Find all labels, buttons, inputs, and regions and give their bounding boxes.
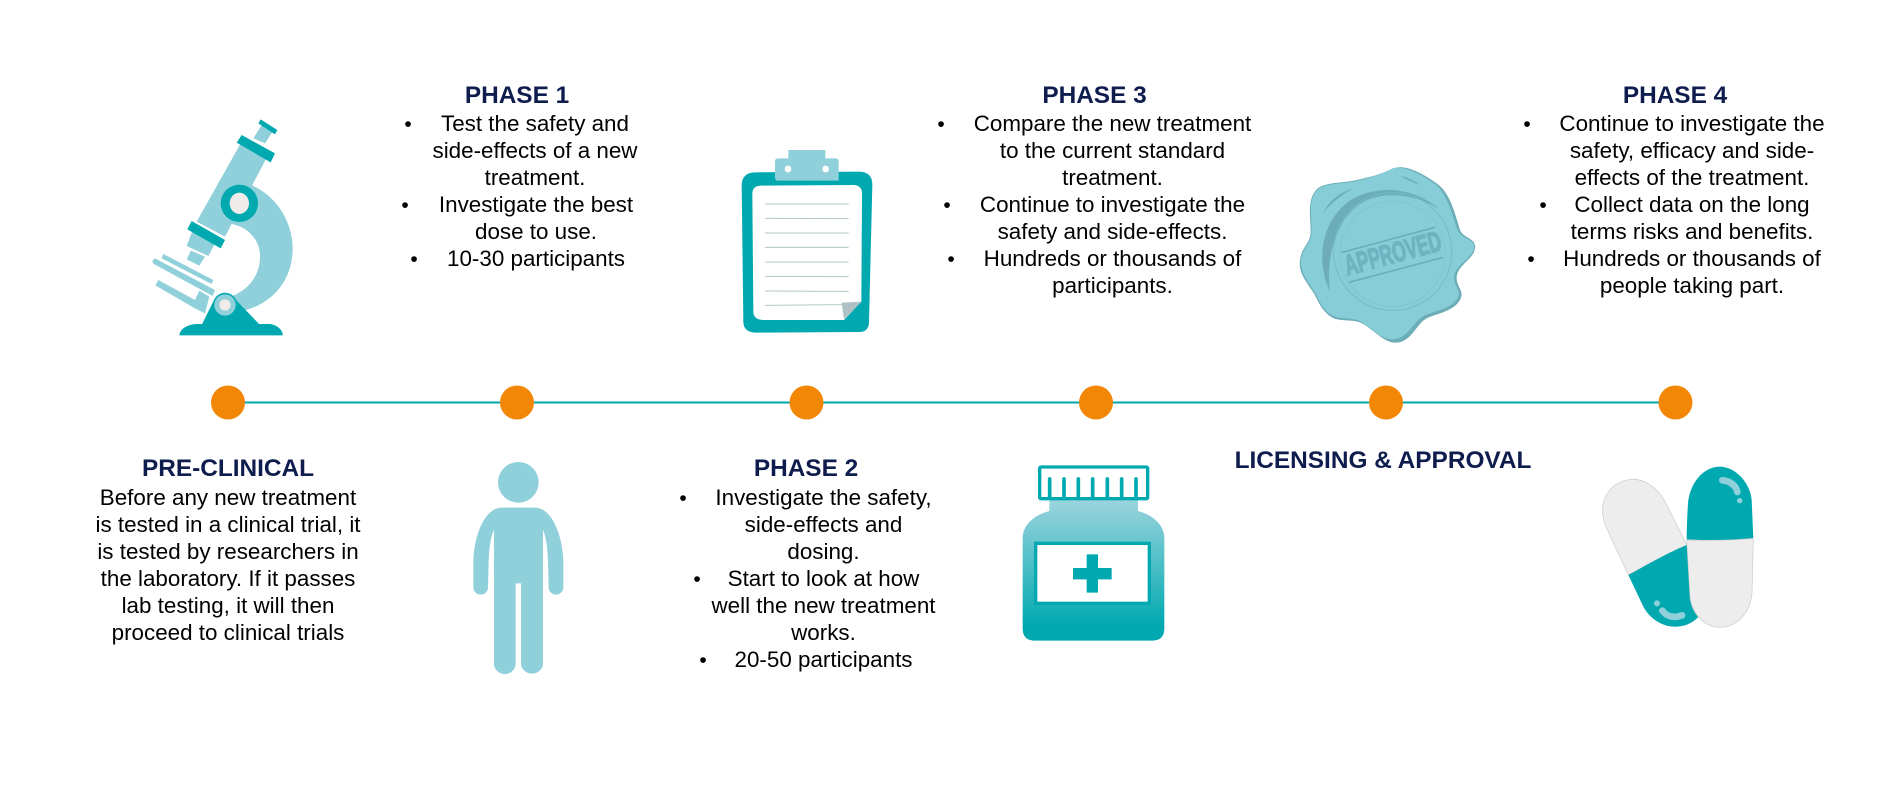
timeline	[211, 386, 1692, 420]
bullet list: phase 2: •	[693, 568, 701, 591]
bullet list: phase 1: •	[410, 248, 418, 271]
bullet list: phase 3: safety and side-effects.	[998, 219, 1227, 244]
icon: approved wax seal	[1300, 167, 1475, 343]
paragraph: pre-clinical: Before any new treatment	[100, 485, 357, 510]
text block: phase 3	[937, 82, 1252, 298]
paragraph: pre-clinical: the laboratory. If it passes	[101, 566, 355, 591]
bullet list: phase 3: treatment.	[1062, 165, 1163, 190]
bullet list: phase 4: people taking part.	[1600, 273, 1784, 298]
text block: phase 4	[1523, 82, 1825, 298]
text block: phase 1	[401, 82, 638, 271]
icon: approved wax seal: APPROVED	[1341, 226, 1445, 282]
icon: capsules	[1603, 467, 1753, 627]
bullet list: phase 3: to the current standard	[1000, 138, 1225, 163]
bullet list: phase 1: dose to use.	[475, 219, 597, 244]
bullet list: phase 1: •	[404, 113, 412, 136]
timeline dot: licensing	[1369, 386, 1403, 420]
icon: clipboard	[742, 150, 872, 333]
heading: licensing and approval: LICENSING & APPROVAL	[1235, 447, 1531, 474]
bullet list: phase 3: Compare the new treatment	[974, 111, 1252, 136]
bullet list: phase 2: well the new treatment	[710, 593, 936, 618]
bullet list: phase 2: Start to look at how	[728, 566, 920, 591]
timeline dot: phase 4	[1658, 386, 1692, 420]
bullet list: phase 2: dosing.	[787, 539, 860, 564]
bullet list: phase 3: Hundreds or thousands of	[984, 246, 1242, 271]
bullet list: phase 3: •	[943, 194, 951, 217]
bullet list: phase 3: •	[937, 113, 945, 136]
icon: medicine bottle	[1023, 467, 1164, 641]
paragraph: pre-clinical: proceed to clinical trials	[112, 620, 344, 645]
bullet list: phase 4: •	[1523, 113, 1531, 136]
bullet list: phase 2: 20-50 participants	[734, 647, 912, 672]
bullet list: phase 2: •	[699, 649, 707, 672]
bullet list: phase 2: Investigate the safety,	[715, 485, 932, 510]
bullet list: phase 4: Collect data on the long	[1574, 192, 1810, 217]
bullet list: phase 1: Investigate the best	[439, 192, 634, 217]
bullet list: phase 4: effects of the treatment.	[1575, 165, 1809, 190]
heading: phase 1: PHASE 1	[465, 82, 569, 109]
bullet list: phase 1: Test the safety and	[441, 111, 629, 136]
paragraph: pre-clinical: is tested by researchers in	[97, 539, 359, 564]
paragraph: pre-clinical: lab testing, it will then	[122, 593, 334, 618]
bullet list: phase 4: •	[1527, 248, 1535, 271]
text block: phase 2	[679, 455, 936, 672]
bullet list: phase 4: safety, efficacy and side-	[1570, 138, 1814, 163]
heading: phase 2: PHASE 2	[754, 455, 858, 482]
paragraph: pre-clinical	[95, 485, 361, 645]
bullet list: phase 4	[1523, 111, 1825, 298]
bullet list: phase 1	[401, 111, 638, 271]
bullet list: phase 2: works.	[790, 620, 856, 645]
bullet list: phase 4: •	[1539, 194, 1547, 217]
bullet list: phase 1: •	[401, 194, 409, 217]
bullet list: phase 2: side-effects and	[745, 512, 902, 537]
heading: phase 4: PHASE 4	[1623, 82, 1728, 109]
bullet list: phase 3: Continue to investigate the	[980, 192, 1245, 217]
bullet list: phase 1: treatment.	[485, 165, 585, 190]
bullet list: phase 3: participants.	[1052, 273, 1173, 298]
bullet list: phase 3	[937, 111, 1252, 298]
icon: person	[473, 462, 563, 674]
bullet list: phase 3: •	[947, 248, 955, 271]
text block: pre-clinical	[95, 455, 361, 645]
bullet list: phase 2: •	[679, 487, 687, 510]
bullet list: phase 4: Continue to investigate the	[1559, 111, 1825, 136]
icon: microscope	[152, 119, 293, 335]
bullet list: phase 2	[679, 485, 936, 672]
paragraph: pre-clinical: is tested in a clinical trial, it	[95, 512, 361, 537]
timeline dot: phase 1	[500, 386, 534, 420]
timeline dot: phase 2	[790, 386, 824, 420]
bullet list: phase 4: terms risks and benefits.	[1571, 219, 1813, 244]
bullet list: phase 4: Hundreds or thousands of	[1563, 246, 1822, 271]
timeline dot: pre-clinical	[211, 386, 245, 420]
timeline dot: phase 3	[1079, 386, 1113, 420]
heading: phase 3: PHASE 3	[1042, 82, 1147, 109]
bullet list: phase 1: side-effects of a new	[433, 138, 638, 163]
heading: pre-clinical: PRE-CLINICAL	[142, 455, 314, 482]
bullet list: phase 1: 10-30 participants	[447, 246, 625, 271]
